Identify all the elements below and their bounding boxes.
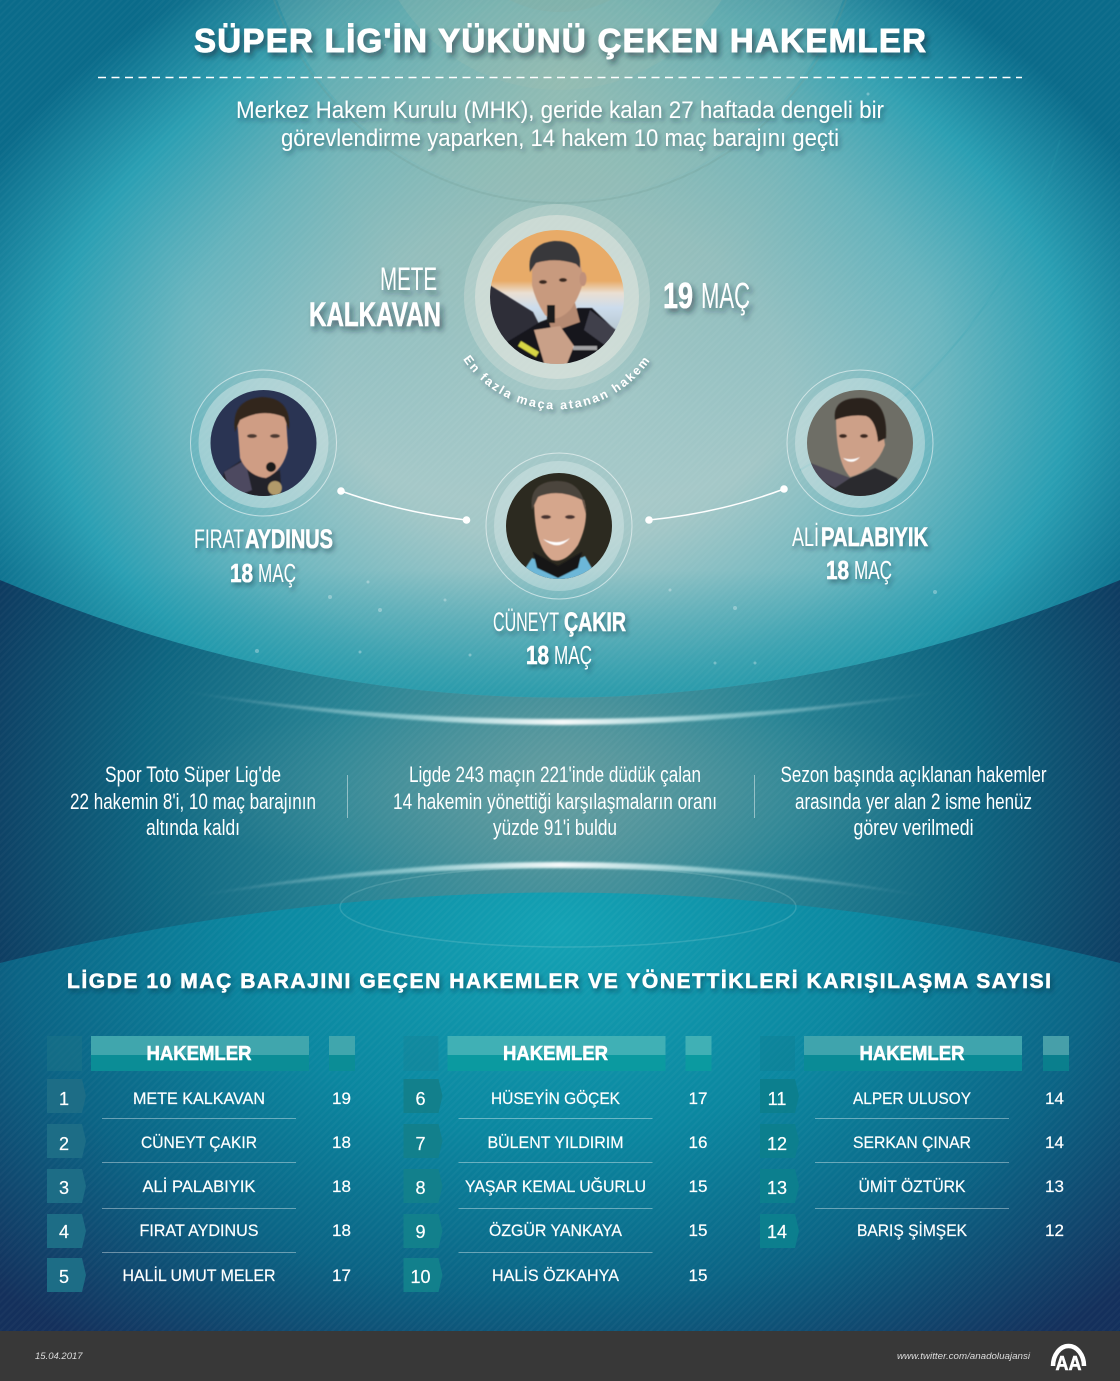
table 1: 18 xyxy=(332,1177,351,1196)
note 2: yüzde 91'i buldu xyxy=(493,815,617,840)
table 2: 7 xyxy=(415,1134,426,1154)
name: CÜNEYT xyxy=(493,607,559,637)
table header xyxy=(47,1036,355,1071)
table 1: 3 xyxy=(59,1178,69,1198)
table 3: ALPER ULUSOY xyxy=(853,1089,971,1108)
note 2 xyxy=(393,762,717,840)
table 3: 12 xyxy=(1045,1221,1064,1240)
table 2: BÜLENT YILDIRIM xyxy=(488,1133,624,1152)
table 1: METE KALKAVAN xyxy=(133,1089,265,1108)
note 3: Sezon başında açıklanan hakemler xyxy=(780,762,1046,787)
note 1: altında kaldı xyxy=(146,815,240,840)
icon: AA logo: AA xyxy=(1056,1353,1082,1375)
table 2: 15 xyxy=(689,1221,707,1240)
connector right xyxy=(645,485,788,524)
match count xyxy=(663,275,750,316)
date: 15.04.2017 xyxy=(35,1351,83,1362)
table 2: 15 xyxy=(689,1177,707,1196)
match count: 18 xyxy=(230,558,253,588)
note 3 xyxy=(780,762,1046,840)
intro text: Merkez Hakem Kurulu (MHK), geride kalan 27 haftada dengeli bir xyxy=(236,97,884,124)
table header: HAKEMLER xyxy=(503,1043,609,1065)
table 1: 19 xyxy=(332,1089,351,1108)
curved caption xyxy=(463,359,651,409)
section heading: LİGDE 10 MAÇ BARAJINI GEÇEN HAKEMLER VE YÖNETTİKLERİ KARIŞILAŞMA SAYISI xyxy=(67,970,1051,993)
intro text: görevlendirme yaparken, 14 hakem 10 maç barajını geçti xyxy=(281,125,839,152)
table 2: 8 xyxy=(415,1178,426,1198)
table header: HAKEMLER xyxy=(860,1043,965,1065)
table 3: BARIŞ ŞİMŞEK xyxy=(857,1221,968,1240)
note 2: 14 hakemin yönettiği karşılaşmaların oranı xyxy=(393,789,717,814)
photo: Ali Palabıyık xyxy=(807,390,914,500)
note 1: 22 hakemin 8'i, 10 maç barajının xyxy=(70,789,316,814)
table 1: HALİL UMUT MELER xyxy=(122,1266,276,1285)
name: KALKAVAN xyxy=(309,296,441,334)
table 1: CÜNEYT ÇAKIR xyxy=(141,1133,257,1152)
match count xyxy=(230,558,296,588)
match count: MAÇ xyxy=(854,555,892,585)
referee: Fırat Aydınus xyxy=(190,370,336,588)
match count: MAÇ xyxy=(701,275,750,316)
table 2: 6 xyxy=(415,1089,426,1109)
table 3: 13 xyxy=(1045,1177,1064,1196)
match count: 19 xyxy=(663,275,693,316)
name xyxy=(792,521,928,552)
note 1: Spor Toto Süper Lig'de xyxy=(105,762,281,787)
table 1: 17 xyxy=(332,1266,351,1285)
photo: Cüneyt Çakır xyxy=(505,472,612,582)
note 3: görev verilmedi xyxy=(854,815,974,840)
referee: Mete Kalkavan xyxy=(309,204,754,415)
table 1: 1 xyxy=(59,1089,69,1109)
table 3: ÜMİT ÖZTÜRK xyxy=(858,1177,966,1196)
match count xyxy=(826,555,892,585)
table 3: 14 xyxy=(1045,1089,1064,1108)
match count xyxy=(526,640,592,670)
table 2: HALİS ÖZKAHYA xyxy=(492,1266,620,1285)
note 2: Ligde 243 maçın 221'inde düdük çalan xyxy=(409,762,701,787)
name: METE xyxy=(380,261,437,297)
match count: MAÇ xyxy=(554,640,592,670)
intro text xyxy=(236,97,884,152)
table 1: 4 xyxy=(59,1222,69,1242)
table 2: 15 xyxy=(689,1266,707,1285)
name: ÇAKIR xyxy=(564,607,626,637)
table 2: ÖZGÜR YANKAYA xyxy=(489,1221,623,1240)
source: www.twitter.com/anadoluajansi xyxy=(897,1351,1031,1362)
photo: Mete Kalkavan xyxy=(488,230,626,366)
table 2: 16 xyxy=(689,1133,707,1152)
match count: 18 xyxy=(526,640,549,670)
table 2: 17 xyxy=(689,1089,707,1108)
table 1: 18 xyxy=(332,1133,351,1152)
photo: Fırat Aydınus xyxy=(210,390,317,500)
note 1 xyxy=(70,762,316,840)
match count: 18 xyxy=(826,555,849,585)
referee: Cüneyt Çakır xyxy=(486,453,632,670)
icon: AA logo xyxy=(1053,1346,1084,1375)
table header xyxy=(760,1036,1069,1071)
table 3 xyxy=(760,1036,1069,1248)
referee: Mete Kalkavan: En fazla maça atanan hakem xyxy=(463,354,652,415)
title: SÜPER LİG'İN YÜKÜNÜ ÇEKEN HAKEMLER xyxy=(194,22,926,59)
table 3: 14 xyxy=(1045,1133,1064,1152)
table 1 xyxy=(47,1036,355,1292)
footer xyxy=(0,1331,1120,1381)
table 2: 10 xyxy=(410,1267,431,1287)
connector left xyxy=(337,487,470,524)
table 1: 18 xyxy=(332,1221,351,1240)
table 1: ALİ PALABIYIK xyxy=(142,1177,256,1196)
name xyxy=(309,261,441,334)
table 1: FIRAT AYDINUS xyxy=(140,1221,258,1240)
table 2 xyxy=(404,1036,712,1292)
table 3: 13 xyxy=(767,1178,787,1198)
name: AYDINUS xyxy=(245,524,333,554)
table 2: HÜSEYİN GÖÇEK xyxy=(491,1089,621,1108)
table 3: 11 xyxy=(768,1089,786,1109)
name: FIRAT xyxy=(194,524,244,554)
table 3: 14 xyxy=(767,1222,787,1242)
name: ALİ xyxy=(792,521,819,552)
name: PALABIYIK xyxy=(821,522,928,552)
table 2: YAŞAR KEMAL UĞURLU xyxy=(465,1177,646,1196)
table 1: 5 xyxy=(59,1267,69,1287)
note 3: arasında yer alan 2 isme henüz xyxy=(795,789,1032,814)
name xyxy=(194,524,333,554)
table header xyxy=(404,1036,712,1071)
table 3: 12 xyxy=(767,1134,787,1154)
table 3: SERKAN ÇINAR xyxy=(853,1133,971,1152)
table 1: 2 xyxy=(59,1134,69,1154)
match count: MAÇ xyxy=(258,558,296,588)
referee: Ali Palabıyık xyxy=(787,370,933,585)
table 2: 9 xyxy=(415,1222,426,1242)
table header: HAKEMLER xyxy=(146,1043,252,1065)
